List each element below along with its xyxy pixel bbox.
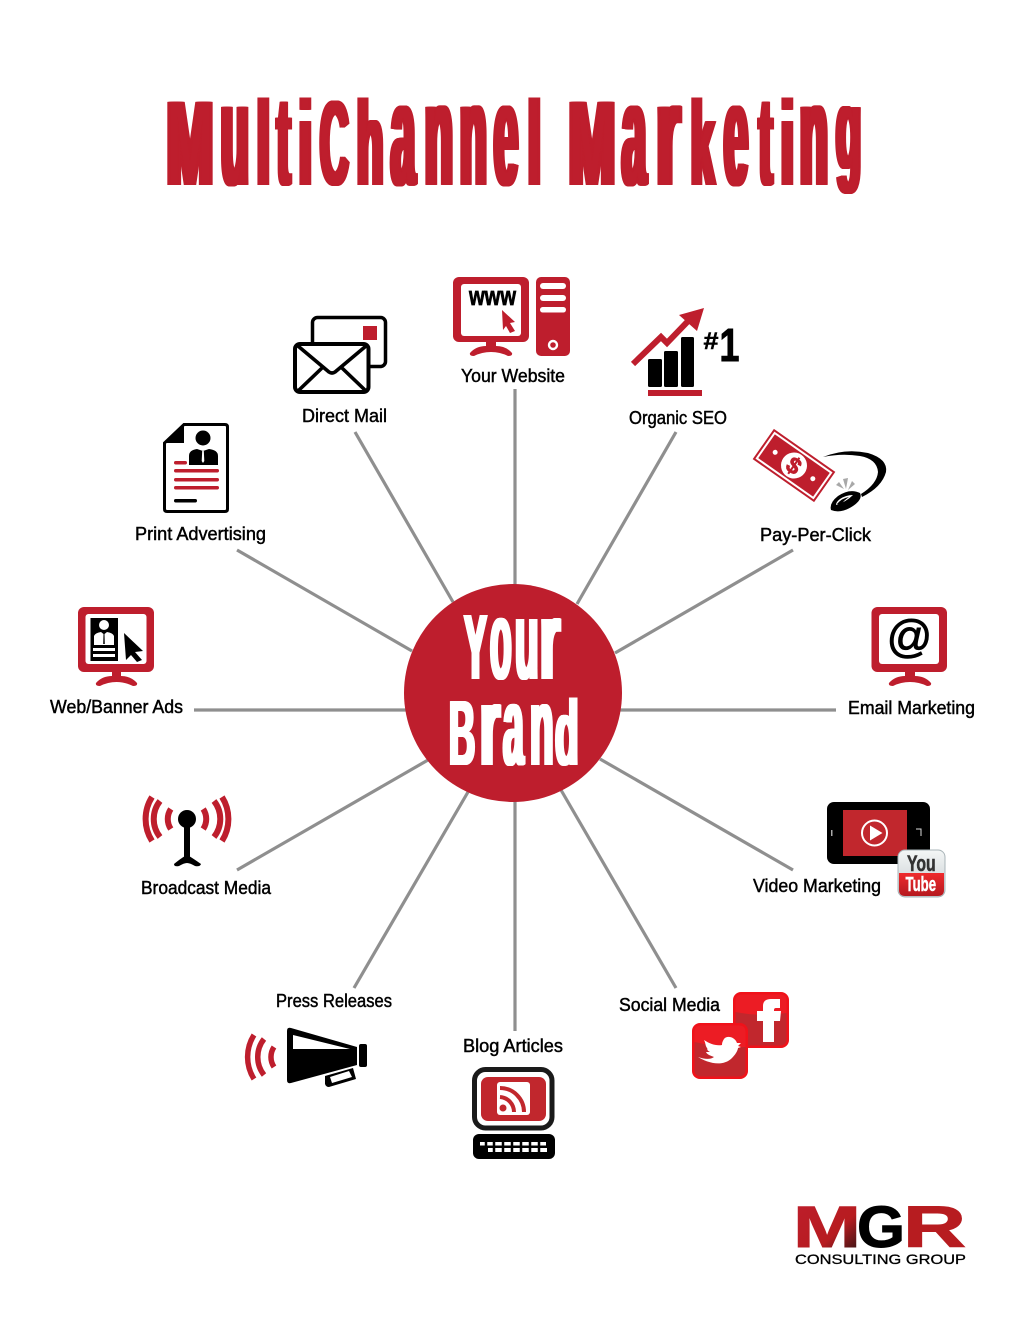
icon: computer tower (536, 277, 570, 356)
icon: printed resume page (163, 423, 228, 512)
icon: rising chart #1 (633, 308, 739, 396)
title: r (657, 50, 680, 216)
icon: monitor with www: www (468, 281, 517, 311)
channel: Press Releases (248, 991, 392, 1087)
title (166, 50, 861, 216)
title: i (780, 75, 793, 211)
icon: dollar bill: $ (781, 451, 807, 480)
logo: MGR Consulting Group: CONSULTING GROUP (795, 1251, 966, 1267)
channel: Your Website (453, 277, 570, 386)
channel: Web/Banner Ads (50, 607, 183, 717)
title: n (425, 50, 453, 216)
icon: rising chart #1: # (704, 328, 718, 355)
label: Your Website (461, 366, 565, 386)
logo: MGR Consulting Group: M (793, 1195, 861, 1260)
title: l (528, 75, 541, 211)
center hub: Your Brand: a (503, 663, 524, 790)
title: e (494, 50, 518, 216)
channel: Email Marketing (848, 607, 975, 718)
center hub: Your Brand: B (449, 681, 475, 785)
center hub: Your Brand: Y (464, 595, 487, 699)
icon: megaphone with waves (248, 1028, 367, 1087)
icon: antenna with waves (146, 797, 228, 866)
channel: Video Marketing (753, 802, 945, 897)
center hub: Your Brand: o (490, 577, 512, 704)
channel: Organic SEO (629, 308, 739, 428)
center hub: Your Brand: u (514, 577, 538, 704)
title: t (759, 69, 772, 212)
title: i (299, 75, 311, 211)
channel: Direct Mail (295, 318, 387, 426)
title: n (800, 50, 828, 216)
logo: MGR Consulting Group: R (903, 1195, 966, 1260)
title: l (257, 75, 269, 211)
label: Press Releases (276, 991, 392, 1011)
center hub: Your Brand (404, 584, 622, 802)
title: k (691, 75, 714, 211)
channel: Broadcast Media (141, 797, 272, 898)
label: Video Marketing (753, 876, 881, 896)
logo: MGR Consulting Group: G (857, 1195, 905, 1260)
center hub: Your Brand: r (540, 577, 560, 704)
channel: Social Media (619, 992, 789, 1079)
title: e (724, 50, 748, 216)
channel: Blog Articles (463, 1036, 563, 1159)
icon: monitor with at sign: @ (887, 611, 932, 662)
title: u (221, 50, 249, 216)
title: n (460, 50, 487, 216)
label: Email Marketing (848, 698, 975, 718)
title: C (320, 75, 348, 211)
icon: mouse with cord (823, 451, 886, 511)
label: Direct Mail (302, 406, 387, 426)
icon: phone with video player (827, 802, 930, 864)
icon: YouTube badge: You (907, 853, 936, 877)
title: M (568, 75, 614, 211)
label: Organic SEO (629, 408, 727, 428)
icon: envelopes (295, 318, 386, 392)
channel: Print Advertising (135, 423, 266, 544)
title: a (622, 50, 646, 216)
label: Social Media (619, 995, 721, 1015)
icon: facebook badge (733, 992, 789, 1048)
label: Blog Articles (463, 1036, 563, 1056)
icon: rising chart #1: 1 (720, 320, 739, 371)
center hub: Your Brand: n (530, 663, 553, 790)
title: t (277, 69, 290, 212)
label: Pay-Per-Click (760, 525, 872, 545)
logo: MGR Consulting Group (793, 1195, 966, 1267)
connector lines from hub to channels (194, 389, 836, 1031)
icon: YouTube badge: Tube (906, 873, 936, 896)
label: Web/Banner Ads (50, 697, 183, 717)
title: g (836, 62, 861, 194)
channel: Pay-Per-Click (753, 429, 886, 545)
title: h (357, 75, 383, 211)
center hub: Your Brand: r (480, 663, 499, 790)
title: a (391, 50, 415, 216)
icon: YouTube badge (898, 850, 945, 897)
icon: monitor with banner (78, 607, 154, 686)
label: Broadcast Media (141, 878, 272, 898)
title: M (166, 75, 212, 211)
center hub: Your Brand: d (554, 681, 578, 785)
icon: twitter badge (692, 1023, 748, 1079)
label: Print Advertising (135, 524, 266, 544)
icon: computer with RSS (473, 1070, 555, 1159)
